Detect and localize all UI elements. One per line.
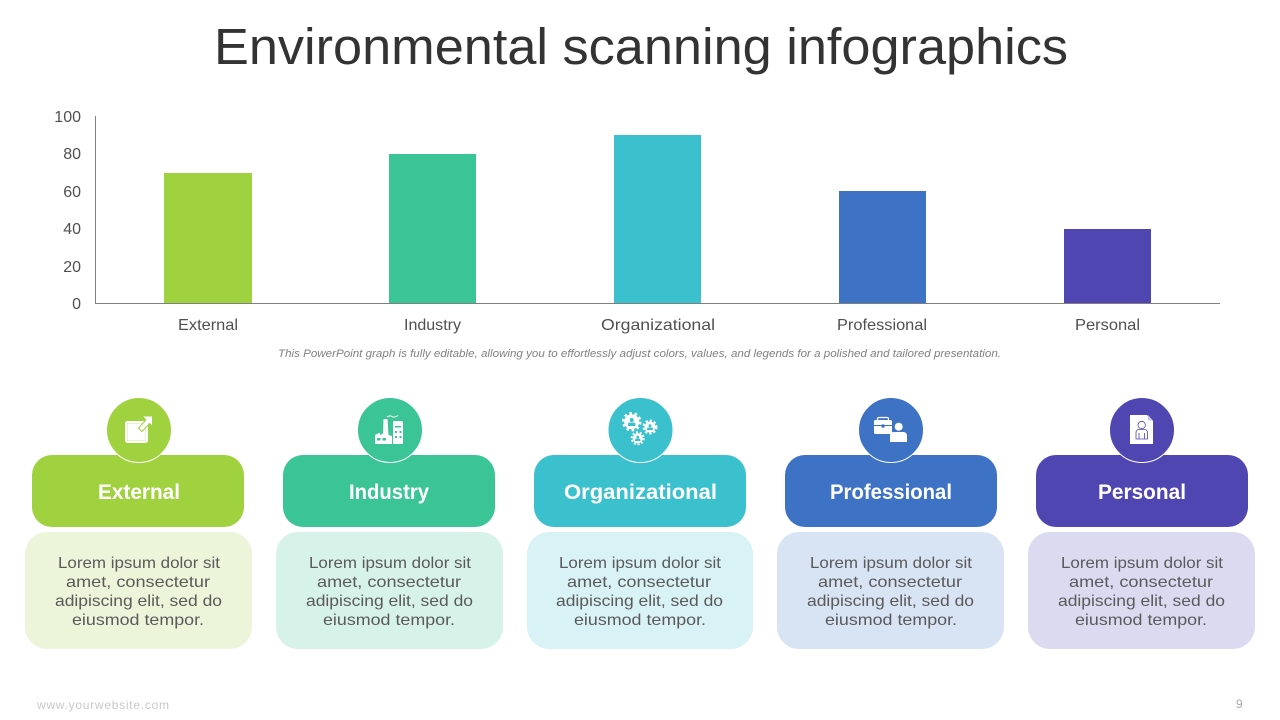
icon: gears with people [608, 398, 673, 462]
description [55, 555, 222, 629]
description: adipiscing elit, sed do [55, 593, 222, 610]
description: adipiscing elit, sed do [1058, 593, 1225, 610]
description [1058, 555, 1225, 629]
y axis labels [54, 109, 81, 313]
y axis labels: 0 [72, 296, 81, 313]
x axis labels: Professional [837, 317, 927, 334]
description: eiusmod tempor. [574, 612, 706, 629]
description: adipiscing elit, sed do [556, 593, 723, 610]
icon: external link [106, 398, 172, 462]
description: adipiscing elit, sed do [807, 593, 974, 610]
description: eiusmod tempor. [72, 612, 204, 629]
panel: external [25, 398, 252, 649]
header [32, 455, 244, 527]
description box [1028, 532, 1255, 649]
description: Lorem ipsum dolor sit [58, 555, 221, 572]
panel: organizational [527, 398, 753, 649]
chart caption: This PowerPoint graph is fully editable, allowing you to effortlessly adjust colors, values, and legends for a polished and tailored presentation. [278, 348, 1001, 360]
title: Environmental scanning infographics [214, 18, 1068, 75]
panel: personal [1028, 398, 1255, 649]
y axis labels: 40 [63, 221, 81, 238]
description: amet, consectetur [818, 574, 963, 591]
description: amet, consectetur [567, 574, 712, 591]
description: adipiscing elit, sed do [306, 593, 473, 610]
description: eiusmod tempor. [1075, 612, 1207, 629]
description [556, 555, 723, 629]
x axis labels: Industry [404, 317, 461, 334]
description: amet, consectetur [1069, 574, 1214, 591]
page number: 9 [1236, 697, 1243, 711]
icon: briefcase and person [858, 398, 924, 462]
heading: External [98, 481, 180, 504]
bar chart [54, 109, 1220, 334]
heading: Industry [349, 481, 429, 504]
description: eiusmod tempor. [323, 612, 455, 629]
description box [777, 532, 1004, 649]
y axis labels: 20 [63, 259, 81, 276]
description: Lorem ipsum dolor sit [810, 555, 973, 572]
description box [25, 532, 252, 649]
panel: professional [777, 398, 1004, 649]
description [306, 555, 473, 629]
description: amet, consectetur [66, 574, 211, 591]
description: Lorem ipsum dolor sit [559, 555, 722, 572]
header [785, 455, 997, 527]
description box [276, 532, 503, 649]
y axis labels: 100 [54, 109, 81, 126]
bars [164, 135, 1151, 303]
heading: Organizational [564, 481, 717, 504]
footer website: www.yourwebsite.com [36, 698, 169, 712]
header [283, 455, 495, 527]
heading: Personal [1098, 481, 1186, 504]
y axis labels: 60 [63, 184, 81, 201]
header [534, 455, 746, 527]
description [807, 555, 974, 629]
x axis labels: Personal [1075, 317, 1140, 334]
x axis labels: Organizational [601, 317, 715, 334]
x axis labels [178, 317, 1140, 334]
icon: personal document [1110, 398, 1174, 462]
header [1036, 455, 1248, 527]
panel: industry [276, 398, 503, 649]
description: Lorem ipsum dolor sit [1061, 555, 1224, 572]
x axis labels: External [178, 317, 238, 334]
description: eiusmod tempor. [825, 612, 957, 629]
description: amet, consectetur [317, 574, 462, 591]
y axis labels: 80 [63, 146, 81, 163]
heading: Professional [830, 481, 952, 504]
description: Lorem ipsum dolor sit [309, 555, 472, 572]
icon: factory [358, 398, 422, 462]
description box [527, 532, 753, 649]
